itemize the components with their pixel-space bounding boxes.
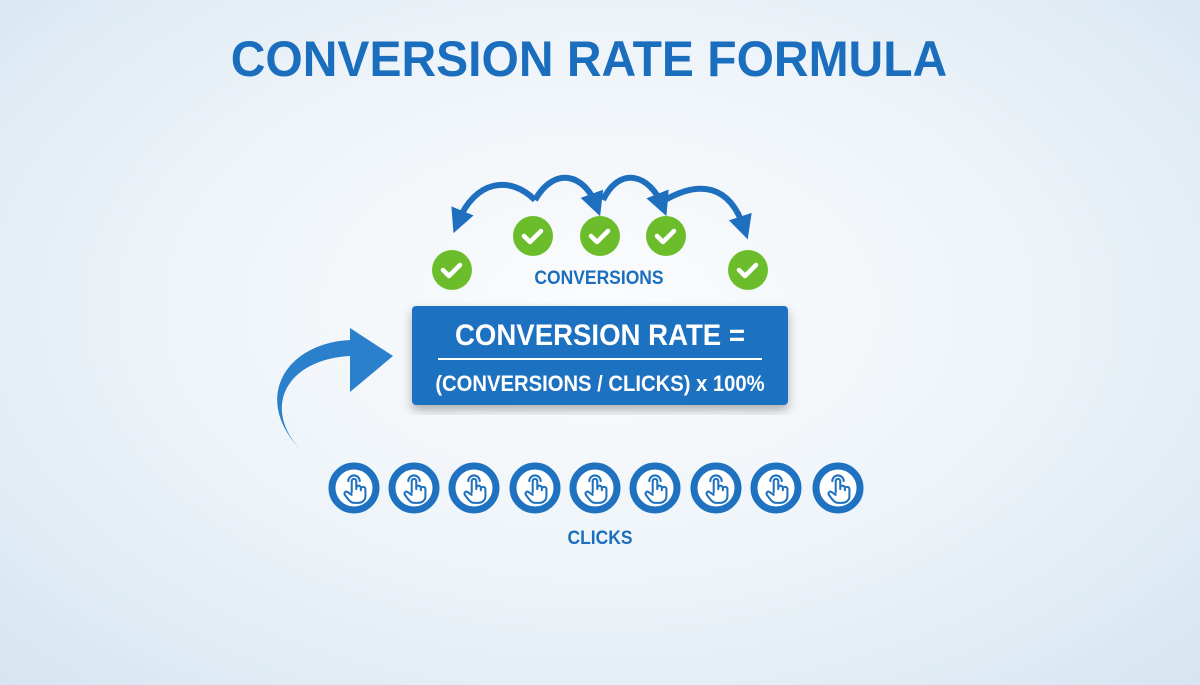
icons: green checks (432, 216, 768, 290)
formula box: CONVERSION RATE = (455, 319, 745, 352)
formula box (412, 306, 788, 405)
arrows: conversion arcs (458, 178, 744, 228)
label: clicks: CLICKS (567, 526, 633, 548)
icons: clicks (332, 466, 860, 510)
title: CONVERSION RATE FORMULA (231, 31, 947, 87)
formula box: (CONVERSIONS / CLICKS) x 100% (435, 372, 765, 396)
label: conversions: CONVERSIONS (534, 266, 664, 288)
arrow: big curved (277, 328, 393, 452)
